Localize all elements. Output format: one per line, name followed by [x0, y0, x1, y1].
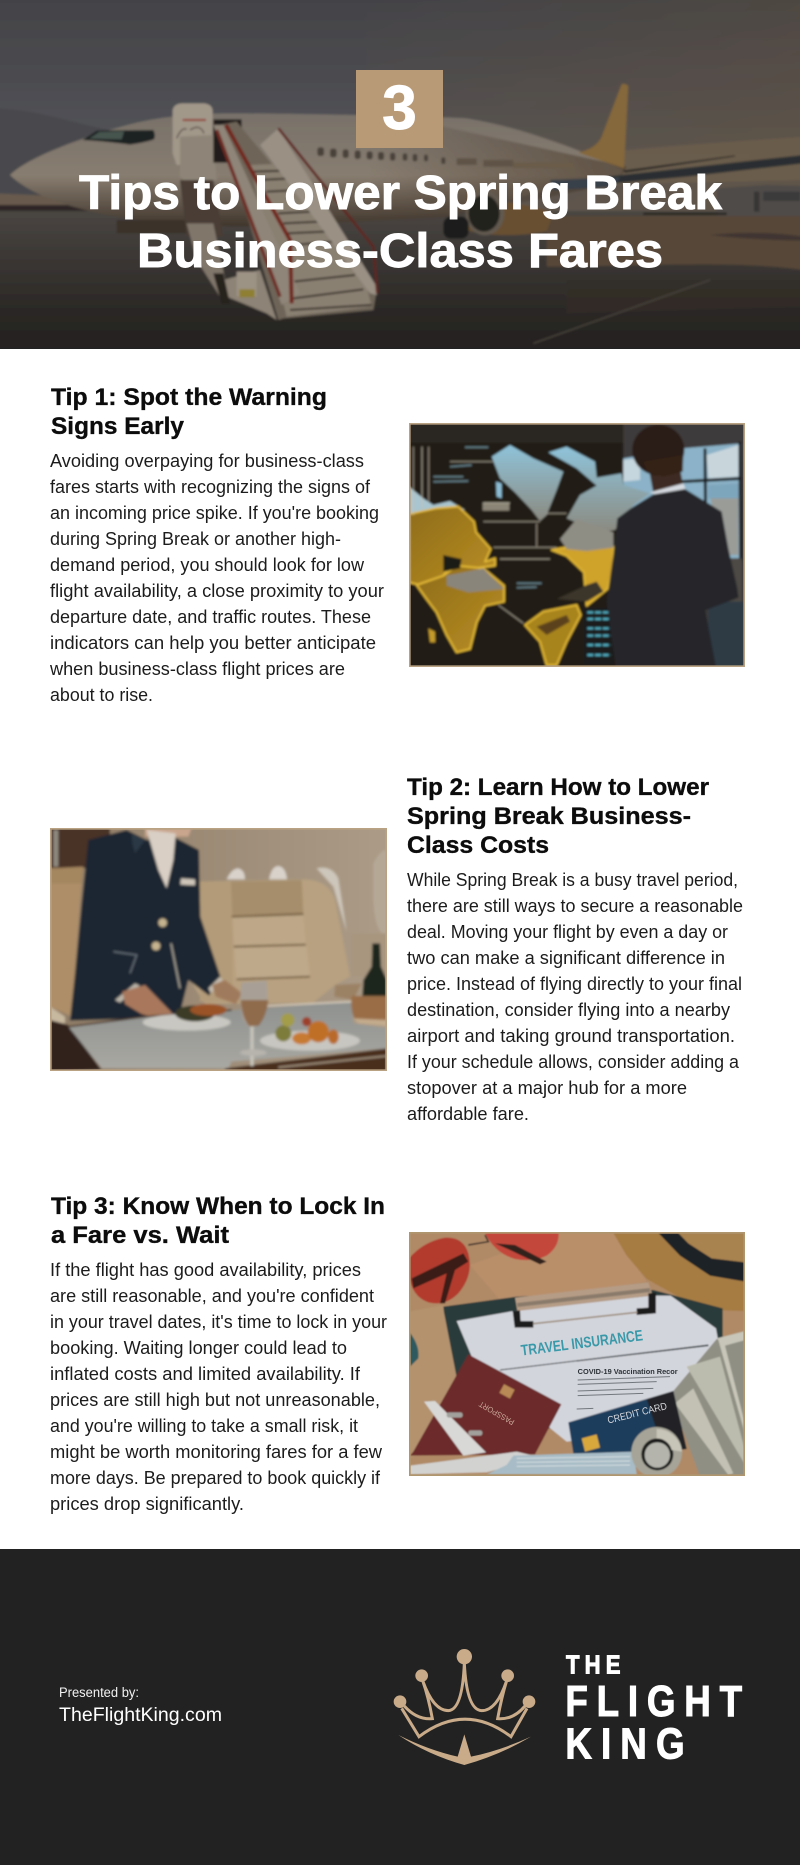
- wing: [600, 155, 800, 184]
- tip 1 body text: departure date, and traffic routes. These: [50, 607, 371, 627]
- tip 2 body text: While Spring Break is a busy travel period,: [407, 870, 738, 890]
- tip 2 body text: destination, consider flying into a nearby: [407, 1000, 730, 1020]
- clipboard: [443, 1290, 723, 1428]
- tip 2 photo: flight attendant serving a business-class meal: [50, 828, 387, 1071]
- engine: [467, 193, 553, 235]
- stethoscope: [631, 1427, 682, 1478]
- cockpit: [83, 130, 155, 145]
- tip 2 body text: affordable fare.: [407, 1104, 529, 1124]
- tip 2 heading: Class Costs: [407, 832, 549, 859]
- tip 3 body text: prices drop significantly.: [50, 1494, 244, 1514]
- panel: footer: [0, 1549, 800, 1865]
- plate 1: [143, 1014, 231, 1031]
- tip 3 body text: and you're willing to take a small risk, it: [50, 1416, 358, 1436]
- tip 2 body text: If your schedule allows, consider adding a: [407, 1052, 740, 1072]
- tip 3 body text: more days. Be prepared to book quickly if: [50, 1468, 381, 1488]
- tip 1 body text: [50, 451, 384, 705]
- tip 3 body text: might be worth monitoring fares for a few: [50, 1442, 383, 1462]
- icon: crown: [394, 1649, 535, 1765]
- tip 2 body text: there are still ways to secure a reasonable: [407, 896, 743, 916]
- bottle and bucket: [362, 943, 387, 1007]
- tip 3 photo: travel insurance clipboard, passport and credit card: TRAVEL INSURANCE: [520, 1327, 644, 1360]
- passport: [410, 1354, 561, 1456]
- tip 3 photo: travel insurance clipboard, passport and credit card: COVID-19 Vaccination Recor: [578, 1367, 678, 1376]
- tip 1 heading: Signs Early: [51, 413, 185, 440]
- stairs body: [220, 122, 377, 320]
- tip 3 body text: booking. Waiting longer could lead to: [50, 1338, 347, 1358]
- tip 3 photo: travel insurance clipboard, passport and credit card: [409, 1232, 745, 1476]
- data panel: [584, 608, 614, 664]
- tip 2 body text: stopover at a major hub for a more: [407, 1078, 687, 1098]
- tip 3 body text: If the flight has good availability, prices: [50, 1260, 361, 1280]
- tip 1 body text: when business-class flight prices are: [50, 659, 345, 679]
- tip 1 heading: [51, 385, 327, 440]
- tail: [578, 84, 628, 168]
- logo wordmark: FLIGHT: [565, 1677, 743, 1726]
- tip 1 body text: demand period, you should look for low: [50, 555, 365, 575]
- stairs rear gantry and supports: [180, 180, 223, 237]
- tip 3 body text: are still reasonable, and you're confident: [50, 1286, 374, 1306]
- map: [492, 445, 563, 521]
- presented by text: [59, 1685, 222, 1726]
- hero photo: airplane with boarding stairs at dusk: [0, 0, 800, 349]
- tip 3 heading: a Fare vs. Wait: [51, 1222, 229, 1249]
- logo wordmark: [565, 1651, 743, 1768]
- tip 2 body text: [407, 870, 743, 1124]
- tip 2 body text: airport and taking ground transportation.: [407, 1026, 735, 1046]
- panel: tip 2: [50, 775, 743, 1124]
- tip 1 body text: indicators can help you better anticipate: [50, 633, 376, 653]
- hat: [613, 1233, 745, 1311]
- panel: hero header: [0, 0, 800, 349]
- glass: [240, 981, 268, 1027]
- tip 3 body text: in your travel dates, it's time to lock in your: [50, 1312, 387, 1332]
- tip 1 body text: during Spring Break or another high-: [50, 529, 341, 549]
- panel: tip 3: [50, 1194, 745, 1514]
- tip 1 photo: businessman looking at a world map: [409, 423, 745, 667]
- title: Business-Class Fares: [137, 225, 663, 278]
- plate 2: [260, 1031, 360, 1051]
- door: [173, 103, 213, 165]
- tip 3 body text: inflated costs and limited availability. If: [50, 1364, 361, 1384]
- tip 2 body text: price. Instead of flying directly to your final: [407, 974, 742, 994]
- tip 1 body text: an incoming price spike. If you're booking: [50, 503, 379, 523]
- credit card: [568, 1391, 687, 1453]
- stair base: [223, 270, 277, 320]
- tip 3 heading: [51, 1194, 385, 1249]
- tip 3 body text: [50, 1260, 387, 1514]
- title: [79, 167, 723, 278]
- airplane: [410, 1452, 531, 1474]
- tip 2 body text: two can make a significant difference in: [407, 948, 725, 968]
- title: Tips to Lower Spring Break: [79, 167, 722, 220]
- mask: [487, 1452, 637, 1474]
- windows: [317, 147, 573, 168]
- money: [670, 1331, 745, 1477]
- tip 2 heading: Spring Break Business-: [407, 803, 691, 830]
- fuselage: [10, 113, 623, 227]
- table: [50, 1020, 102, 1072]
- handrails: [213, 125, 300, 305]
- tip 2 body text: deal. Moving your flight by even a day or: [407, 922, 728, 942]
- presented by text: TheFlightKing.com: [59, 1705, 222, 1726]
- man: [649, 472, 683, 493]
- panel: tip 1: [50, 385, 745, 705]
- tip 1 body text: flight availability, a close proximity to your: [50, 581, 384, 601]
- number 3: 3: [382, 74, 417, 143]
- tip 3 photo: travel insurance clipboard, passport and credit card: CREDIT CARD: [606, 1401, 668, 1427]
- tip 1 body text: Avoiding overpaying for business-class: [50, 451, 364, 471]
- number badge: [356, 70, 443, 148]
- logo wordmark: THE: [566, 1651, 620, 1680]
- logo wordmark: KING: [565, 1720, 685, 1768]
- logo: The Flight King: [394, 1649, 743, 1768]
- tip 2 heading: [407, 775, 709, 859]
- tip 3 body text: prices are still high but not unreasonable,: [50, 1390, 380, 1410]
- tip 3 photo: travel insurance clipboard, passport and credit card: PASSPORT: [477, 1399, 516, 1427]
- tip 1 body text: about to rise.: [50, 685, 153, 705]
- presented by text: Presented by:: [59, 1685, 139, 1700]
- attendant: [145, 828, 192, 837]
- sunglasses: [409, 1238, 470, 1303]
- tip 1 body text: fares starts with recognizing the signs of: [50, 477, 371, 497]
